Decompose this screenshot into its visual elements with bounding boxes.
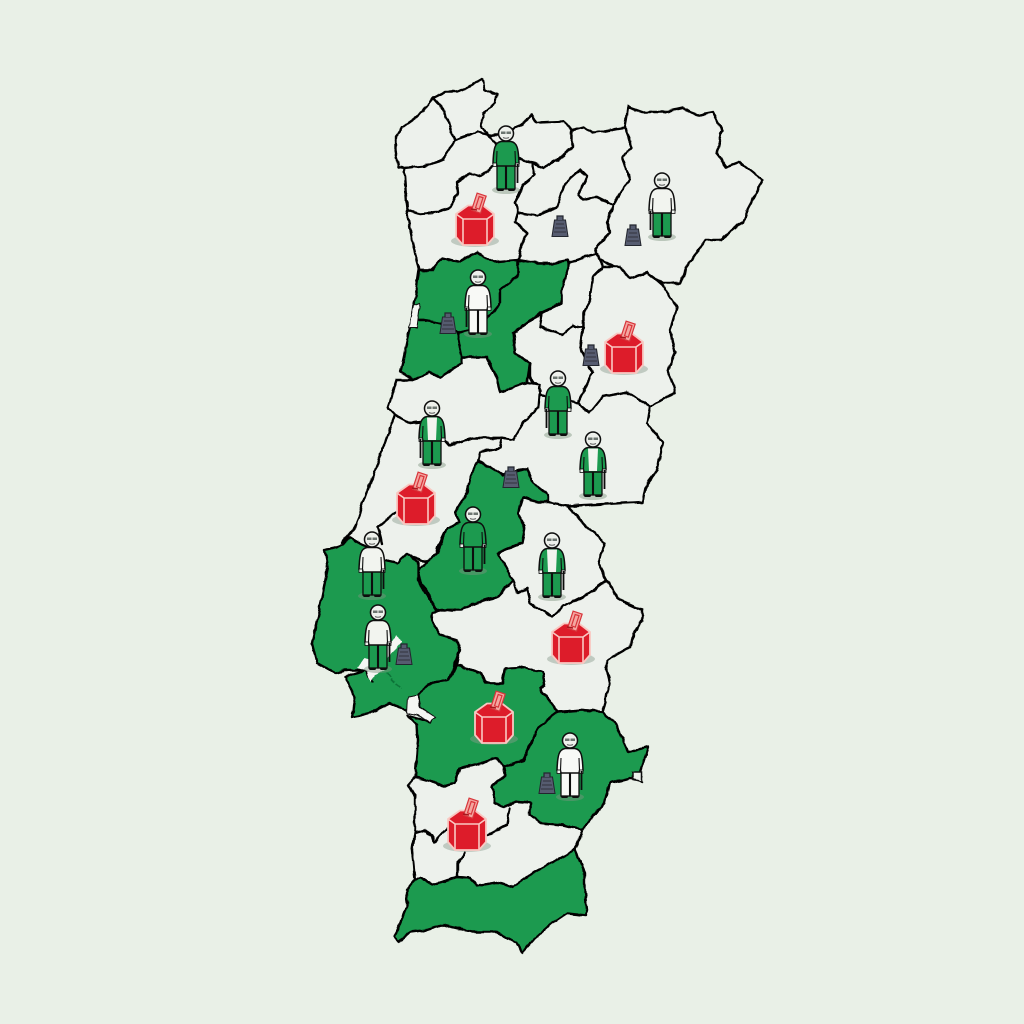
figure: elder Coimbra bbox=[418, 401, 446, 469]
icon: ballot box 2 bbox=[600, 321, 648, 375]
Aveiro lagoon bbox=[409, 303, 420, 328]
region: Alentejo south bbox=[408, 758, 583, 887]
figure: elder north bbox=[492, 126, 520, 194]
icon: ballot box 1 bbox=[451, 193, 499, 247]
region: Viseu Dao bbox=[540, 254, 603, 335]
region: Porto and Douro west bbox=[404, 132, 535, 270]
figure: elder centre bbox=[544, 371, 572, 439]
icon: weight 4 bbox=[583, 345, 599, 366]
figure: elder north-east bbox=[648, 173, 676, 241]
icon: weight 6 bbox=[396, 644, 412, 664]
icon: ballot box 6 bbox=[443, 798, 491, 852]
figure: elder Lisbon bbox=[364, 605, 392, 673]
district line: Tamega west bbox=[518, 158, 533, 163]
region: Viana bbox=[395, 98, 455, 168]
icon: weight 5 bbox=[503, 467, 519, 488]
region: Braga north bbox=[433, 79, 497, 140]
region: Lisbon (green) bbox=[312, 537, 460, 697]
region: Coimbra coast (green) bbox=[400, 320, 462, 380]
district line: Porto south bbox=[407, 167, 493, 214]
icon: ballot box 4 bbox=[547, 611, 595, 665]
icon: weight 7 bbox=[539, 773, 555, 794]
icon: ballot box 5 bbox=[470, 691, 518, 745]
figure: elder Santarem bbox=[459, 507, 487, 575]
region: Cova da Beira bbox=[513, 313, 592, 403]
region: Beira south bbox=[478, 392, 663, 506]
Tagus estuary bbox=[358, 635, 403, 682]
district line: Alentejo south bbox=[458, 853, 465, 877]
figure: elder Beira bbox=[579, 432, 607, 500]
figure: elder in white, Aveiro bbox=[464, 270, 492, 338]
figure: elder in white, Alentejo bbox=[556, 733, 584, 801]
region: Aveiro (green) bbox=[412, 252, 518, 333]
region: Coimbra bbox=[388, 357, 540, 445]
region: Algarve (green) bbox=[395, 850, 587, 952]
Sado estuary bbox=[407, 695, 435, 722]
region: Tamega bbox=[488, 115, 572, 168]
region: Douro bbox=[515, 170, 613, 263]
icon: weight 1 bbox=[552, 216, 568, 236]
district line: Alentejo east bbox=[488, 808, 510, 835]
region: Braganca bbox=[595, 107, 763, 283]
region: Evora north bbox=[432, 580, 642, 712]
region: Vila Real bbox=[515, 127, 632, 215]
region: Portalegre bbox=[498, 497, 607, 617]
figure: elder west bbox=[358, 532, 386, 600]
seam between Lisbon and the peninsula bbox=[374, 672, 424, 697]
river mark bbox=[387, 673, 402, 688]
region: Baixo Alentejo (green) bbox=[492, 710, 648, 830]
region: Leiria bbox=[342, 415, 502, 563]
region: Setubal peninsula (green) bbox=[345, 665, 470, 720]
region: Alentejo central (green) bbox=[407, 665, 558, 787]
figure: elder Portalegre bbox=[538, 533, 566, 601]
region: Viseu south (green) bbox=[457, 260, 568, 392]
icon: weight 3 bbox=[440, 313, 456, 334]
icon: weight 2 bbox=[625, 225, 641, 246]
region: Santarem (green) bbox=[418, 462, 548, 610]
icon: ballot box 3 bbox=[392, 472, 440, 526]
district line: Alentejo coast bbox=[415, 828, 447, 843]
Guadiana notch bbox=[633, 772, 642, 782]
map regions bbox=[312, 79, 763, 952]
region: Beira east bbox=[578, 267, 677, 413]
district line: Leiria interior bbox=[378, 513, 395, 543]
